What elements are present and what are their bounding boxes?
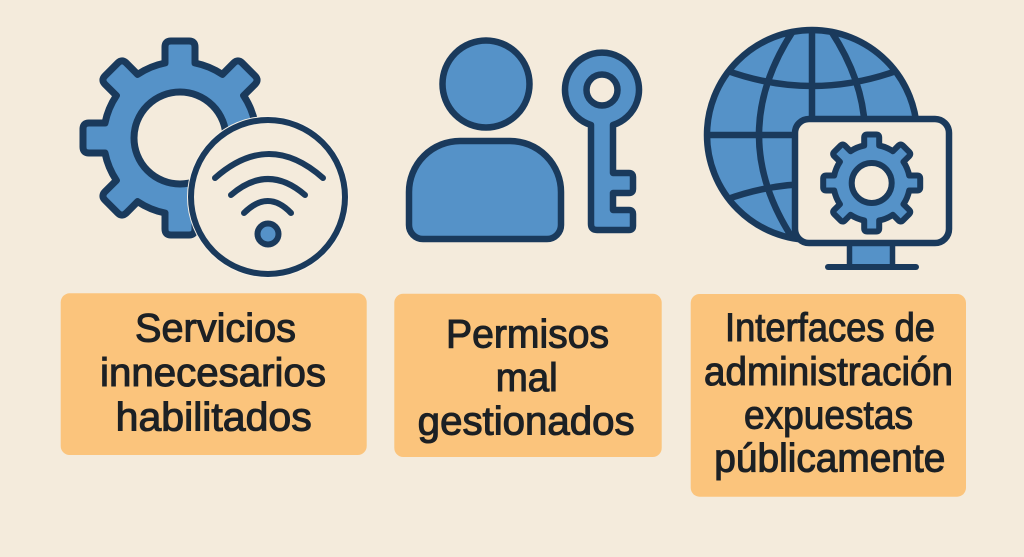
icon: person body <box>409 141 561 239</box>
icon: key <box>565 53 639 230</box>
label: interfaces de administración expuestas públicamente: Interfaces de <box>725 306 935 350</box>
label: interfaces de administración expuestas públicamente: expuestas <box>744 393 913 437</box>
label: servicios innecesarios habilitados: habilitados <box>116 396 312 440</box>
label: permisos mal gestionados: gestionados <box>418 399 635 443</box>
label: permisos mal gestionados: mal <box>496 356 558 400</box>
icon: wifi badge <box>187 116 349 278</box>
icon: globe <box>707 30 917 240</box>
label: permisos mal gestionados <box>418 312 635 443</box>
icon: monitor <box>795 119 949 243</box>
label: interfaces de administración expuestas públicamente: públicamente <box>714 437 945 481</box>
icon: small gear <box>823 134 920 232</box>
panel: servicios innecesarios <box>61 293 367 455</box>
icon: gear <box>83 41 277 235</box>
icon: person head <box>442 40 530 128</box>
label: interfaces de administración expuestas públicamente: administración <box>704 350 953 394</box>
label: servicios innecesarios habilitados: innecesarios <box>100 351 326 395</box>
icon: monitor stand <box>828 243 916 267</box>
label: interfaces de administración expuestas públicamente <box>704 306 953 481</box>
icon: gear with wifi <box>83 41 349 278</box>
panel: interfaces de administración <box>691 294 966 497</box>
icon: person with key <box>409 40 639 239</box>
label: servicios innecesarios habilitados <box>100 307 326 440</box>
label: permisos mal gestionados: Permisos <box>446 312 609 356</box>
icon: globe with monitor <box>707 30 949 267</box>
label: servicios innecesarios habilitados: Servicios <box>135 307 296 351</box>
panel: permisos mal gestionados <box>394 294 662 457</box>
